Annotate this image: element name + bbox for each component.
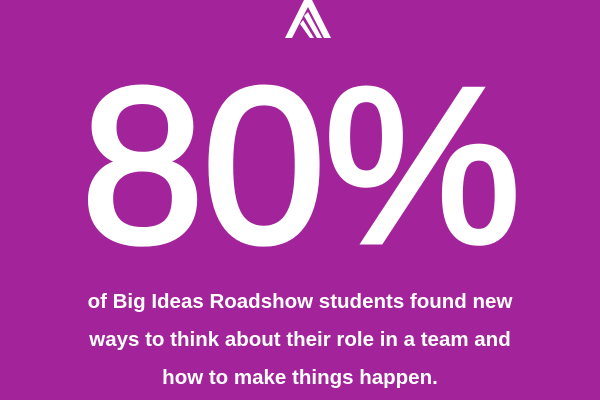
logo (285, 0, 331, 38)
description text (88, 290, 512, 389)
description text: ways to think about their role in a team and (89, 328, 511, 351)
headline stat: 80% (81, 42, 519, 290)
description text: how to make things happen. (162, 366, 438, 389)
description text: of Big Ideas Roadshow students found new (88, 290, 512, 313)
